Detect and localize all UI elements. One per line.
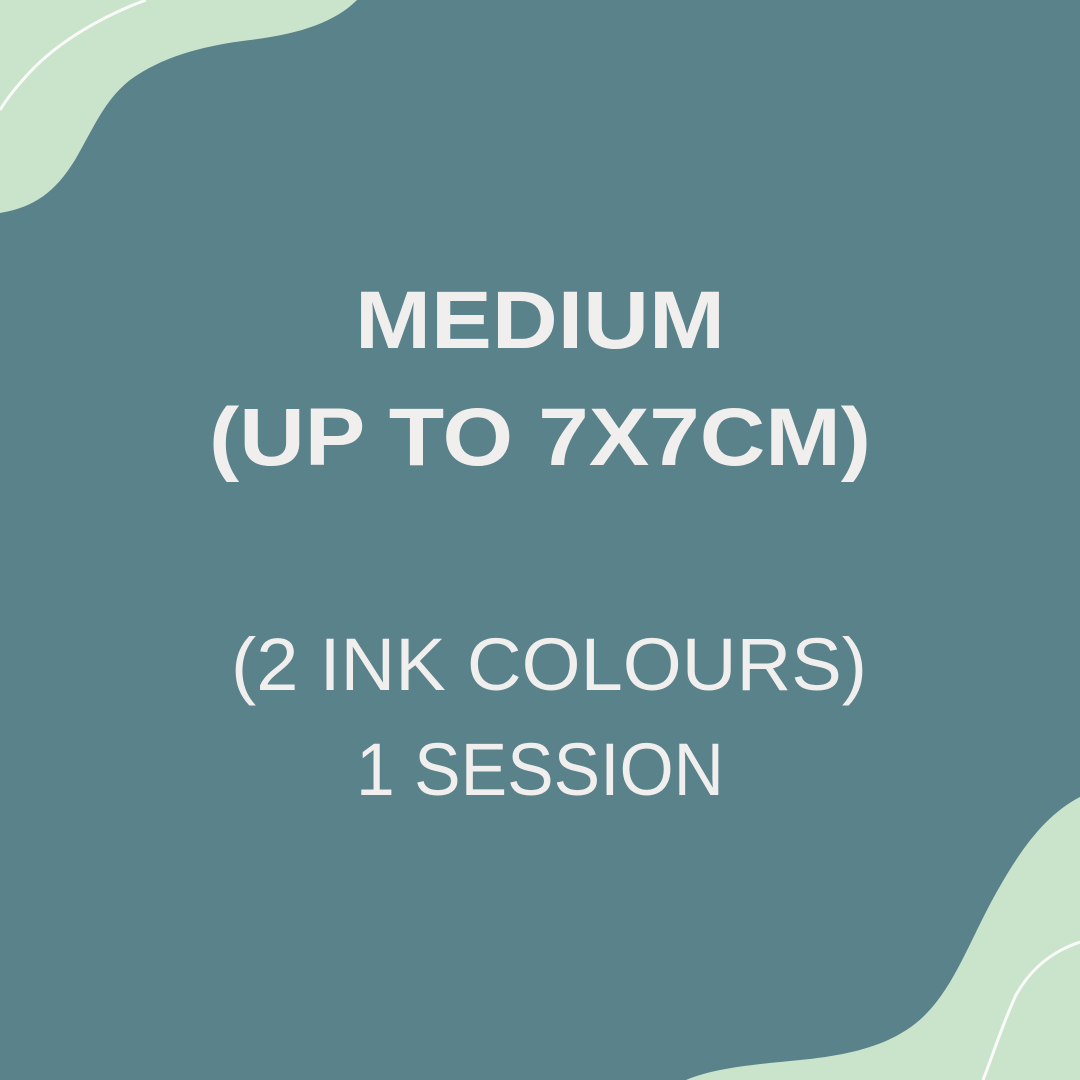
blob: top-left decoration xyxy=(0,0,357,213)
subtitle: ink colours and session xyxy=(231,623,867,811)
title: MEDIUM (UP TO 7X7CM): (UP TO 7X7CM) xyxy=(209,392,871,483)
title: MEDIUM (UP TO 7X7CM) xyxy=(209,275,871,483)
blob: bottom-right decoration xyxy=(686,797,1080,1080)
subtitle: ink colours and session: (2 INK COLOURS) xyxy=(231,623,867,706)
title: MEDIUM (UP TO 7X7CM): MEDIUM xyxy=(355,275,725,366)
subtitle: ink colours and session: 1 SESSION xyxy=(356,728,724,811)
